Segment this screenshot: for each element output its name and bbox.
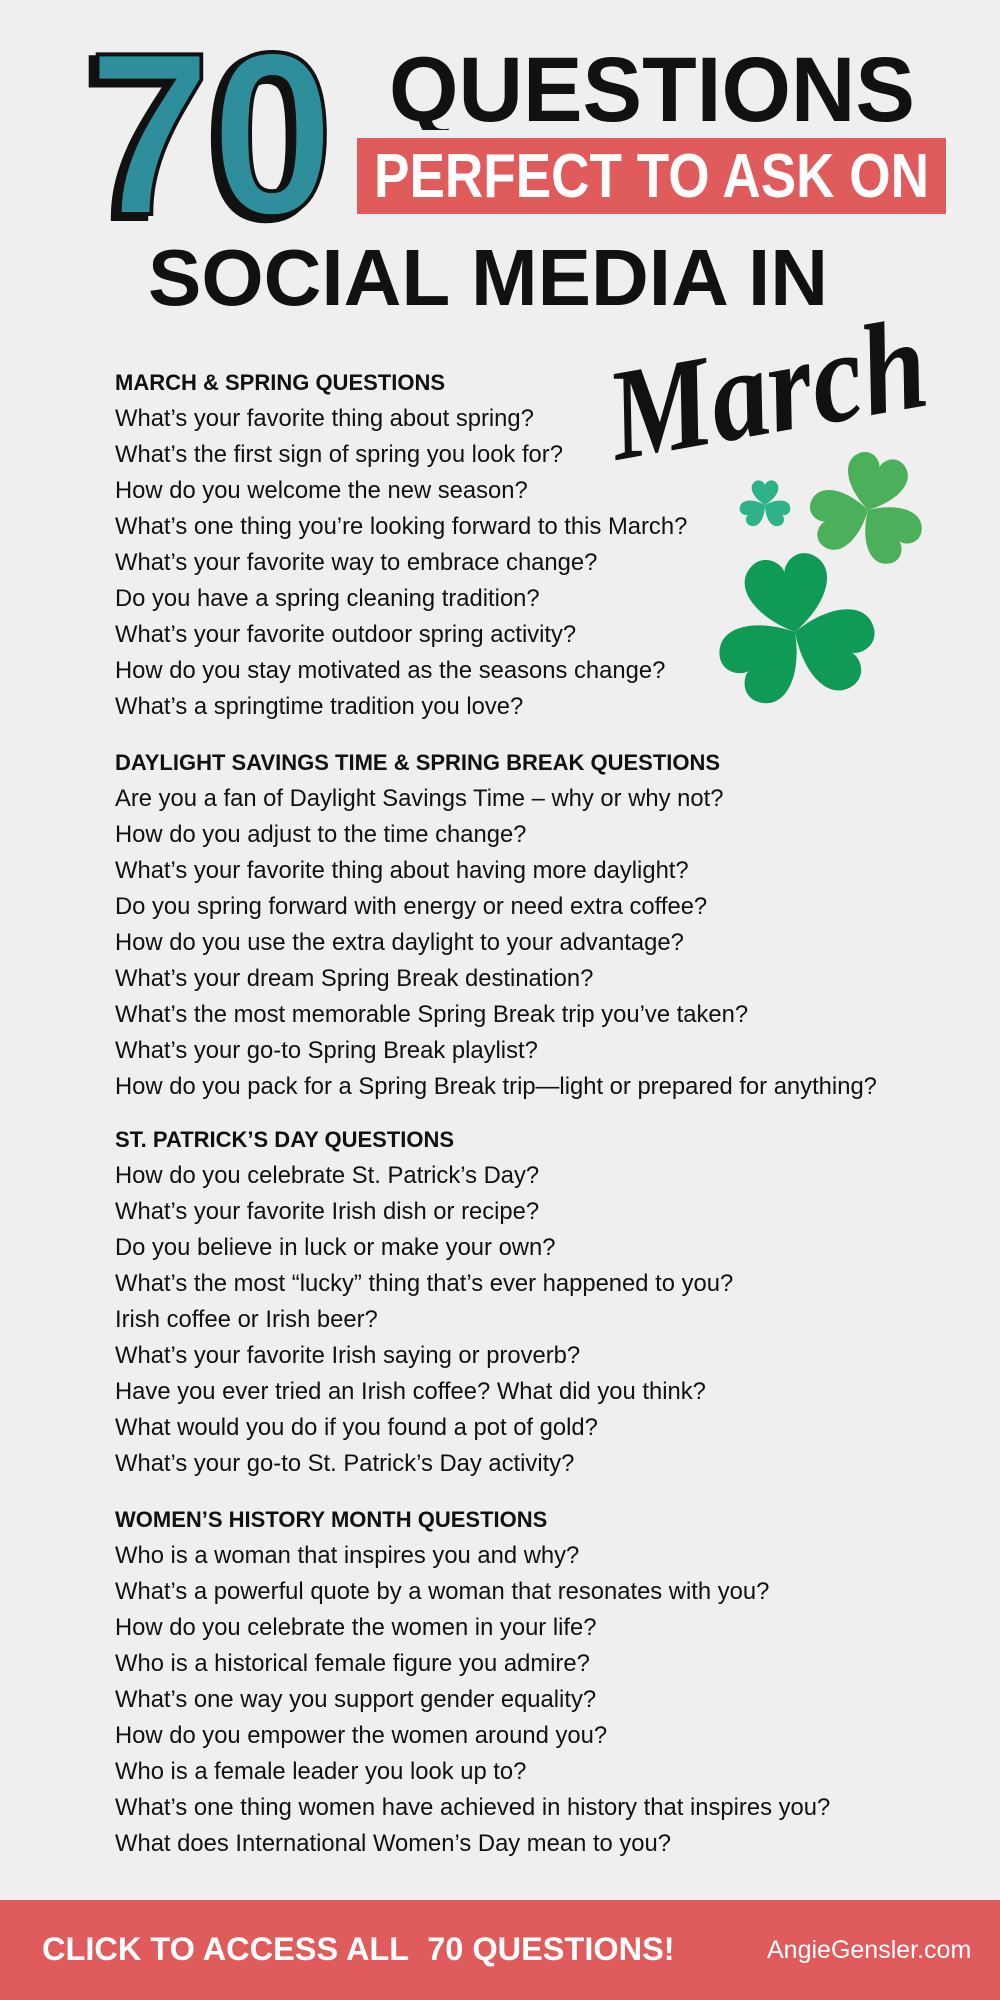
section: Women's History Month: What’s one way you support gender equality? bbox=[115, 1686, 596, 1713]
section: St Patrick's Day: What’s your go-to St. Patrick’s Day activity? bbox=[115, 1450, 574, 1477]
section: Daylight savings: What’s the most memorable Spring Break trip you’ve taken? bbox=[115, 1001, 748, 1028]
section: Daylight savings: What’s your go-to Spring Break playlist? bbox=[115, 1037, 538, 1064]
section: Women's History Month: How do you empower the women around you? bbox=[115, 1722, 607, 1749]
section: March & Spring: How do you welcome the new season? bbox=[115, 477, 528, 504]
large green shamrock bbox=[696, 542, 893, 720]
section: St Patrick's Day bbox=[115, 1127, 733, 1477]
section: March & Spring bbox=[115, 370, 687, 720]
section: March & Spring: What’s one thing you’re looking forward to this March? bbox=[115, 513, 687, 540]
section: St Patrick's Day: How do you celebrate St. Patrick’s Day? bbox=[115, 1162, 539, 1189]
section: March & Spring: MARCH & SPRING QUESTIONS bbox=[115, 370, 445, 395]
section: Daylight savings: Are you a fan of Daylight Savings Time – why or why not? bbox=[115, 785, 723, 812]
section: March & Spring: What’s your favorite thing about spring? bbox=[115, 405, 534, 432]
section: Women's History Month: What’s one thing women have achieved in history that inspires you? bbox=[115, 1794, 830, 1821]
section: March & Spring: Do you have a spring cleaning tradition? bbox=[115, 585, 540, 612]
section: Daylight savings: How do you adjust to the time change? bbox=[115, 821, 526, 848]
small teal shamrock bbox=[737, 480, 793, 529]
section: St Patrick's Day: Do you believe in luck or make your own? bbox=[115, 1234, 555, 1261]
section: Women's History Month: WOMEN’S HISTORY MONTH QUESTIONS bbox=[115, 1507, 547, 1532]
section: St Patrick's Day: What’s your favorite Irish saying or proverb? bbox=[115, 1342, 580, 1369]
icon: shamrocks bbox=[719, 452, 922, 704]
section: Women's History Month bbox=[115, 1507, 830, 1857]
section: March & Spring: What’s a springtime tradition you love? bbox=[115, 693, 523, 720]
section: St Patrick's Day: ST. PATRICK’S DAY QUESTIONS bbox=[115, 1127, 454, 1152]
section: Daylight savings bbox=[115, 750, 877, 1100]
footer call to action: CLICK TO ACCESS ALL 70 QUESTIONS! bbox=[42, 1931, 675, 1967]
section: St Patrick's Day: What would you do if you found a pot of gold? bbox=[115, 1414, 598, 1441]
section: St Patrick's Day: What’s your favorite Irish dish or recipe? bbox=[115, 1198, 539, 1225]
section: Daylight savings: How do you pack for a Spring Break trip—light or prepared for anything? bbox=[115, 1073, 877, 1100]
section: Daylight savings: DAYLIGHT SAVINGS TIME & SPRING BREAK QUESTIONS bbox=[115, 750, 720, 775]
section: March & Spring: What’s the first sign of spring you look for? bbox=[115, 441, 563, 468]
section: Daylight savings: How do you use the extra daylight to your advantage? bbox=[115, 929, 684, 956]
section: St Patrick's Day: Have you ever tried an Irish coffee? What did you think? bbox=[115, 1378, 706, 1405]
title: social media in: SOCIAL MEDIA IN bbox=[148, 233, 828, 322]
section: St Patrick's Day: What’s the most “lucky” thing that’s ever happened to you? bbox=[115, 1270, 733, 1297]
section: Daylight savings: Do you spring forward with energy or need extra coffee? bbox=[115, 893, 707, 920]
section: Daylight savings: What’s your dream Spring Break destination? bbox=[115, 965, 593, 992]
section: Women's History Month: Who is a female leader you look up to? bbox=[115, 1758, 526, 1785]
section: St Patrick's Day: Irish coffee or Irish beer? bbox=[115, 1306, 378, 1333]
section: March & Spring: How do you stay motivated as the seasons change? bbox=[115, 657, 665, 684]
section: Women's History Month: How do you celebrate the women in your life? bbox=[115, 1614, 596, 1641]
footer website: AngieGensler.com bbox=[767, 1936, 971, 1964]
section: Women's History Month: Who is a historical female figure you admire? bbox=[115, 1650, 590, 1677]
medium green shamrock bbox=[793, 440, 944, 579]
section: Women's History Month: What does International Women’s Day mean to you? bbox=[115, 1830, 671, 1857]
section: March & Spring: What’s your favorite outdoor spring activity? bbox=[115, 621, 576, 648]
section: Daylight savings: What’s your favorite thing about having more daylight? bbox=[115, 857, 689, 884]
section: Women's History Month: What’s a powerful quote by a woman that resonates with you? bbox=[115, 1578, 769, 1605]
section: March & Spring: What’s your favorite way to embrace change? bbox=[115, 549, 597, 576]
footer banner bbox=[0, 1900, 1000, 2000]
section: Women's History Month: Who is a woman that inspires you and why? bbox=[115, 1542, 579, 1569]
